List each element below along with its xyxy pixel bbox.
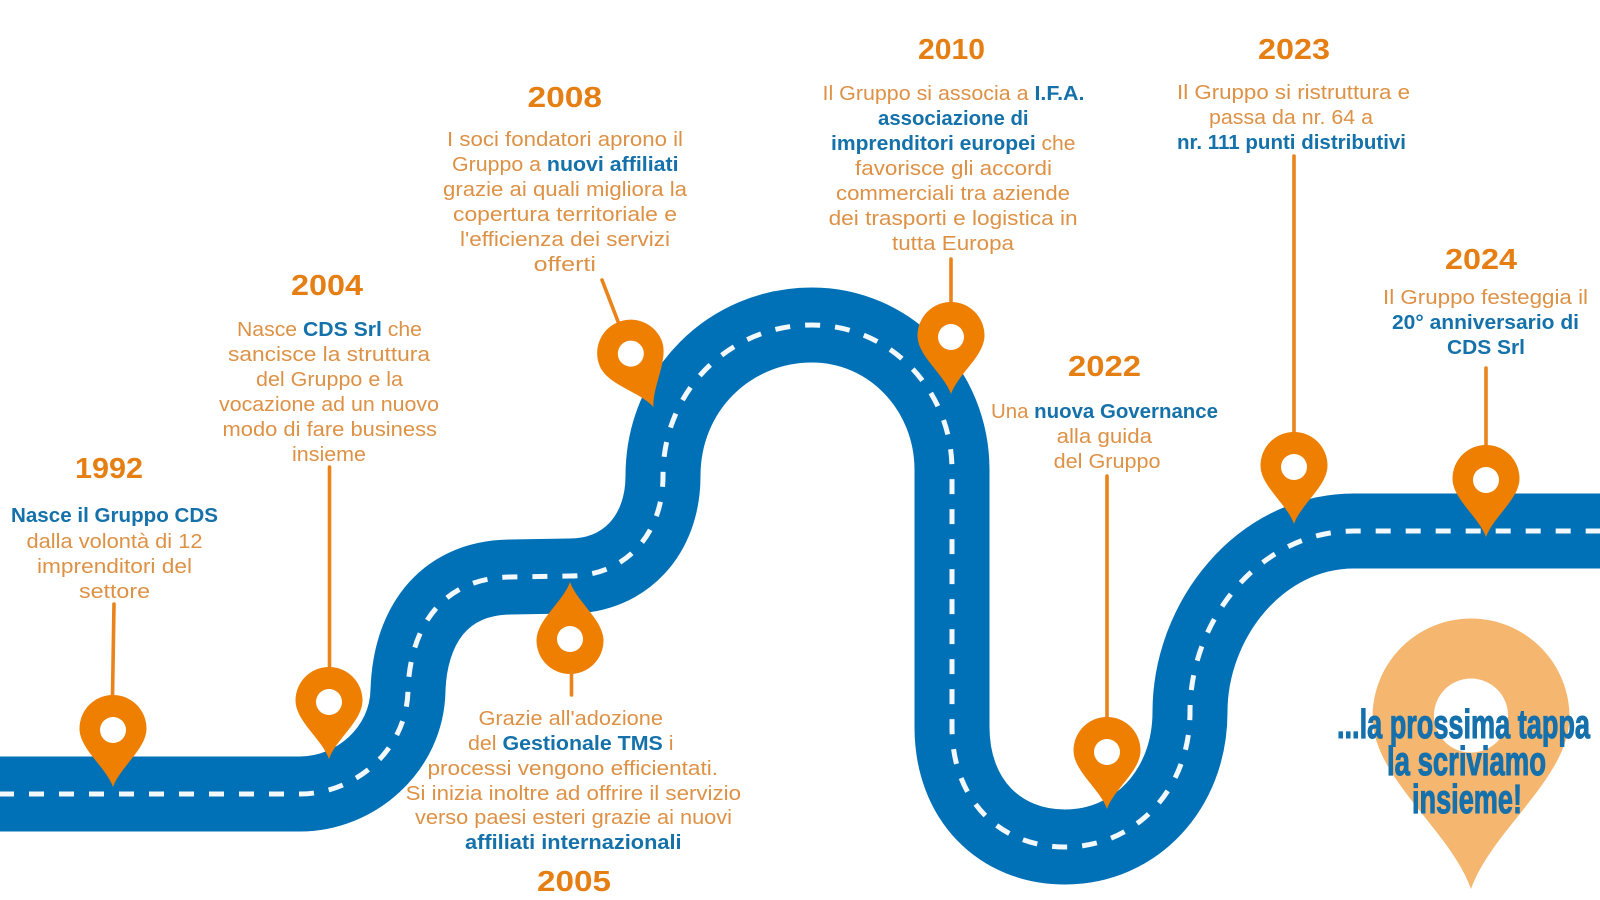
text 2024	[1383, 287, 1588, 359]
year 2004: 2004	[291, 270, 363, 302]
road	[0, 325, 1600, 847]
text 2005: verso paesi esteri grazie ai nuovi	[415, 807, 732, 829]
pin 2010	[918, 302, 984, 394]
text 2024: CDS Srl	[1447, 337, 1525, 359]
text 2022: Una nuova Governance	[991, 401, 1218, 423]
closing message	[1337, 701, 1591, 822]
text 2008	[443, 129, 688, 276]
year 2010: 2010	[918, 34, 985, 66]
milestone 2024	[1383, 244, 1588, 537]
connector 2008	[602, 280, 619, 324]
text 2022: del Gruppo	[1054, 451, 1161, 473]
text 2004: modo di fare business	[222, 419, 437, 441]
text 2010: associazione di	[878, 108, 1029, 130]
milestone 2010	[822, 34, 1084, 394]
text 2008: grazie ai quali migliora la	[443, 179, 688, 201]
connector 2005	[570, 672, 573, 695]
text 2004: vocazione ad un nuovo	[219, 394, 439, 416]
text 2010: dei trasporti e logistica in	[829, 208, 1078, 230]
text 2005: del Gestionale TMS i	[468, 733, 674, 755]
text 2010: tutta Europa	[892, 233, 1015, 255]
pin 2023	[1260, 432, 1328, 524]
year 2022: 2022	[1068, 351, 1141, 383]
text 2010: favorisce gli accordi	[855, 158, 1052, 180]
milestone 2022	[991, 351, 1218, 809]
text 2005: Si inizia inoltre ad offrire il servizio	[406, 783, 741, 805]
text 2004	[219, 319, 439, 466]
pin 2008	[587, 309, 684, 420]
pin 2005	[536, 582, 604, 674]
text 2022: alla guida	[1057, 426, 1153, 448]
text 1992: Nasce il Gruppo CDS	[11, 505, 218, 527]
text 2005: processi vengono efficientati.	[428, 758, 718, 780]
connector 2023	[1292, 156, 1296, 434]
milestone 2008	[443, 82, 688, 420]
pin 2022	[1074, 717, 1140, 809]
text 2005	[406, 708, 741, 854]
text 2023: nr. 111 punti distributivi	[1177, 132, 1406, 154]
text 1992: dalla volontà di 12	[26, 531, 202, 553]
pin 2024	[1452, 445, 1520, 537]
text 2004: Nasce CDS Srl che	[237, 319, 422, 341]
connector 1992	[112, 604, 114, 697]
text 1992	[11, 505, 218, 603]
text 2008: copertura territoriale e	[453, 204, 677, 226]
milestone 2023	[1177, 34, 1410, 524]
text 2005: affiliati internazionali	[465, 832, 682, 854]
text 1992: imprenditori del	[37, 556, 192, 578]
text 2005: Grazie all'adozione	[478, 708, 663, 730]
text 2008: I soci fondatori aprono il	[447, 129, 683, 151]
milestone 1992	[11, 453, 218, 787]
text 2010: imprenditori europei che	[831, 133, 1076, 155]
text 1992: settore	[79, 581, 150, 603]
text 2023	[1177, 82, 1410, 154]
text 2010: Il Gruppo si associa a I.F.A.	[822, 83, 1084, 105]
year 2024: 2024	[1445, 244, 1517, 276]
year 2008: 2008	[528, 82, 602, 114]
milestone 2004	[219, 270, 439, 759]
connector 2022	[1105, 476, 1109, 719]
text 2008: l'efficienza dei servizi	[460, 229, 670, 251]
text 2008: offerti	[534, 254, 596, 276]
closing message: insieme!	[1412, 776, 1522, 822]
text 2010: commerciali tra aziende	[836, 183, 1070, 205]
year 2005: 2005	[537, 866, 611, 898]
text 2008: Gruppo a nuovi affiliati	[452, 154, 679, 176]
year 2023: 2023	[1258, 34, 1330, 66]
text 2004: sancisce la struttura	[228, 344, 431, 366]
pin 1992	[80, 695, 146, 787]
milestone 2005	[406, 582, 741, 898]
text 2023: passa da nr. 64 a	[1209, 107, 1374, 129]
year 1992: 1992	[75, 453, 143, 485]
text 2004: del Gruppo e la	[256, 369, 404, 391]
text 2023: Il Gruppo si ristruttura e	[1177, 82, 1410, 104]
connector 2010	[949, 259, 953, 305]
connector 2024	[1484, 368, 1488, 447]
text 2010	[822, 83, 1084, 255]
pin 2004	[296, 667, 362, 759]
text 2004: insieme	[292, 444, 366, 466]
big next-stop pin	[1373, 619, 1569, 889]
text 2024: Il Gruppo festeggia il	[1383, 287, 1588, 309]
text 2024: 20° anniversario di	[1392, 312, 1579, 334]
text 2022	[991, 401, 1218, 473]
connector 2004	[328, 467, 331, 669]
